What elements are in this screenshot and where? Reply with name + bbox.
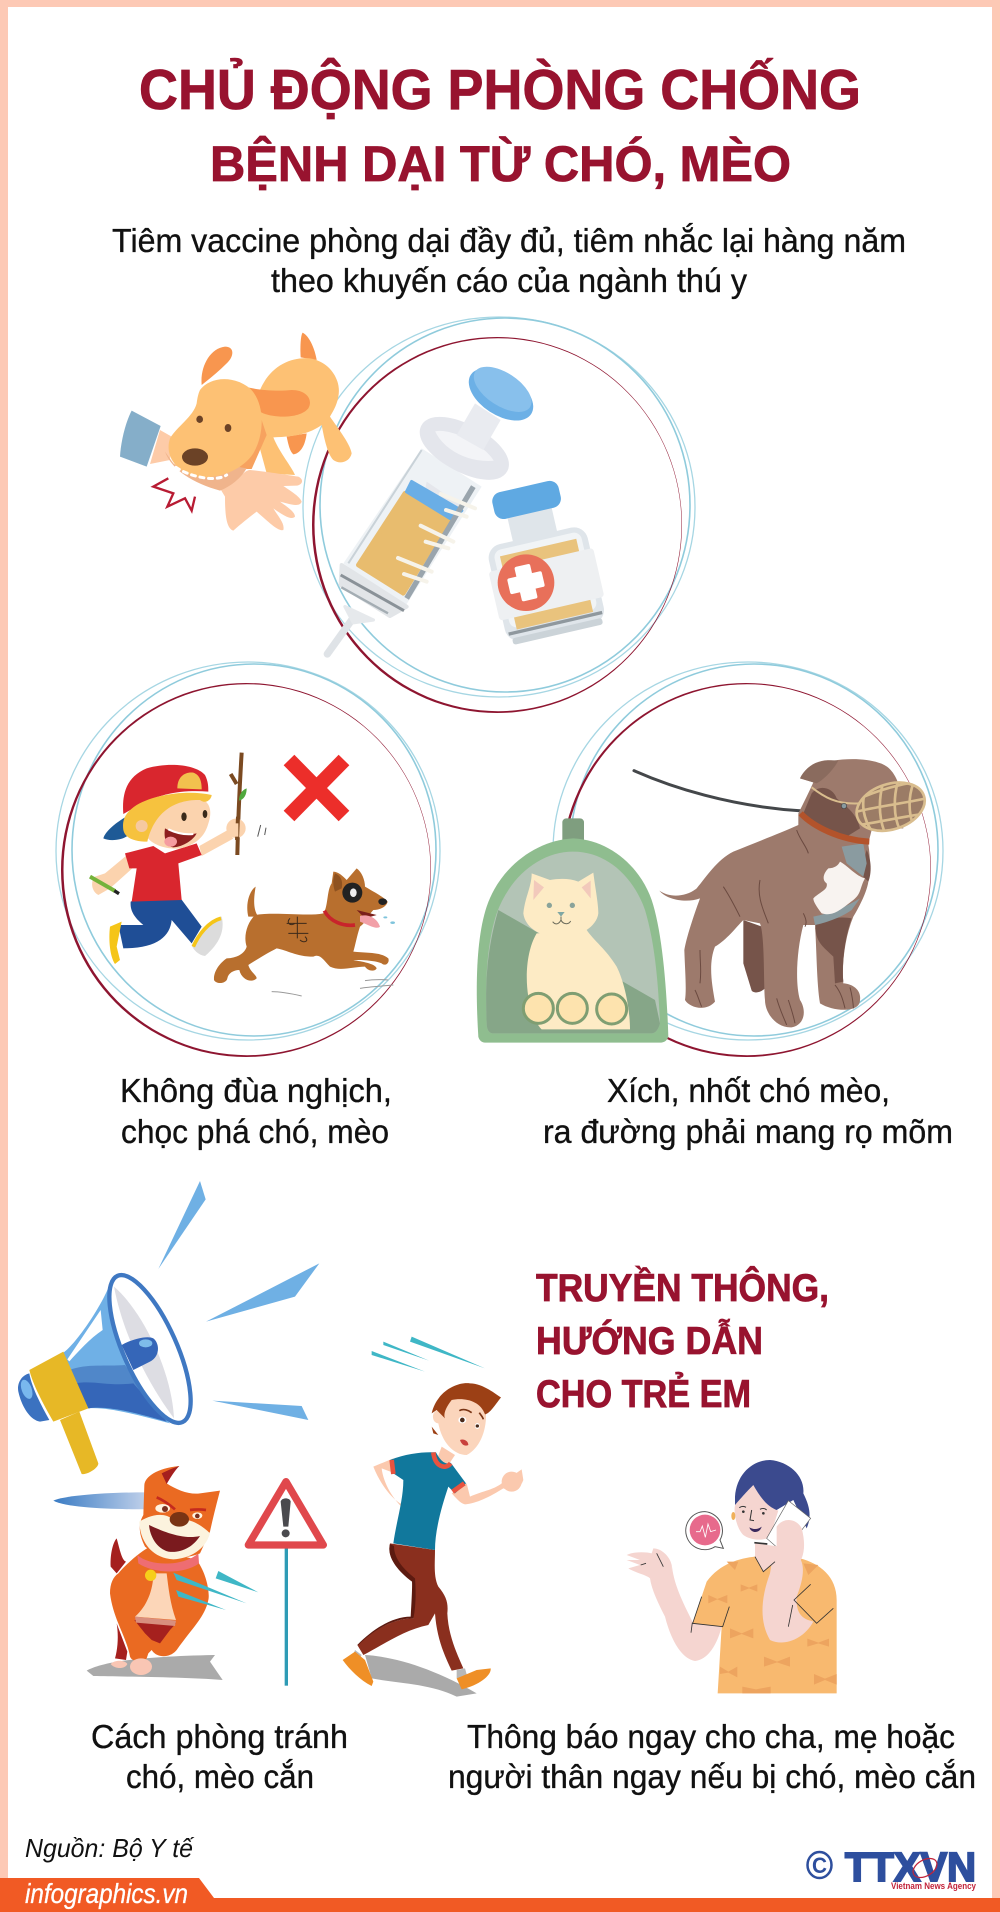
icon: dog biting hand	[120, 333, 352, 531]
source: Nguồn: Bộ Y tế	[25, 1833, 194, 1863]
caption: tell parents: người thân ngay nếu bị chó, mèo cắn	[448, 1758, 976, 1795]
caption: avoid bites: Cách phòng tránh	[91, 1718, 348, 1755]
caption: tell parents	[448, 1718, 976, 1795]
intro text: vaccination	[112, 222, 906, 299]
icon: woman on the phone	[627, 1460, 837, 1693]
title: CHỦ ĐỘNG PHÒNG CHỐNG	[139, 57, 861, 122]
phone	[767, 1501, 811, 1550]
heading: communication: HƯỚNG DẪN	[536, 1319, 763, 1363]
icon: running man	[343, 1337, 523, 1697]
icon: warning sign	[248, 1482, 323, 1686]
caption: no teasing: chọc phá chó, mèo	[121, 1113, 389, 1150]
sleeve	[120, 411, 161, 467]
left arm	[92, 854, 135, 895]
icon: red cross	[289, 760, 344, 816]
arms	[650, 1563, 722, 1661]
icon: cat carrier	[477, 818, 668, 1043]
tip	[327, 620, 352, 654]
scale marks	[398, 494, 475, 582]
intro text: vaccination: Tiêm vaccine phòng dại đầy đủ, tiêm nhắc lại hàng năm	[112, 222, 906, 259]
icon: vaccine vial	[472, 474, 610, 647]
cap	[123, 765, 208, 814]
shirt	[693, 1557, 837, 1693]
caption: avoid bites	[91, 1718, 348, 1795]
body	[743, 920, 767, 992]
paws through ventilation holes	[523, 993, 627, 1024]
intro text: vaccination: theo khuyến cáo của ngành thú y	[271, 262, 747, 299]
icon: megaphone	[18, 1181, 319, 1474]
footer site name: infographics.vn	[25, 1878, 188, 1909]
heading: communication	[536, 1265, 829, 1416]
circle frame: leash and muzzle	[553, 662, 943, 1057]
caption: avoid bites: chó, mèo cắn	[126, 1758, 314, 1795]
caption: leash and muzzle: ra đường phải mang rọ mõm	[543, 1113, 953, 1150]
pants	[118, 898, 202, 948]
icon: boy with stick	[90, 753, 266, 964]
title	[139, 57, 861, 192]
icon: angry dog	[53, 1466, 258, 1680]
stick	[231, 753, 242, 855]
circle frame: vaccine	[303, 317, 695, 713]
icon: syringe	[327, 357, 542, 654]
footer bar	[0, 1878, 1000, 1912]
right arm	[199, 831, 233, 856]
face	[147, 800, 210, 849]
icon: muzzled dog on leash	[634, 759, 931, 1027]
plunger	[457, 403, 501, 450]
cat	[527, 930, 630, 1029]
logo: TTXVN: Vietnam News Agency	[891, 1881, 977, 1892]
circle frame: children	[56, 662, 440, 1057]
muzzle basket	[850, 774, 931, 839]
title: BỆNH DẠI TỪ CHÓ, MÈO	[210, 136, 791, 192]
caption: no teasing	[120, 1072, 392, 1150]
caption: leash and muzzle	[543, 1072, 953, 1150]
heading: communication: CHO TRẺ EM	[536, 1372, 751, 1416]
icon: running brown dog	[214, 868, 395, 996]
caption: tell parents: Thông báo ngay cho cha, mẹ hoặc	[467, 1718, 955, 1755]
flange	[420, 414, 509, 483]
caption: no teasing: Không đùa nghịch,	[120, 1072, 392, 1109]
shirt	[125, 843, 202, 902]
caption: leash and muzzle: Xích, nhốt chó mèo,	[607, 1072, 890, 1109]
heading: communication: TRUYỀN THÔNG,	[536, 1265, 829, 1310]
logo: TTXVN: TTXVN	[845, 1844, 976, 1890]
barrel	[343, 448, 482, 607]
logo: TTXVN: C	[812, 1853, 827, 1878]
speech bubble	[686, 1512, 723, 1550]
